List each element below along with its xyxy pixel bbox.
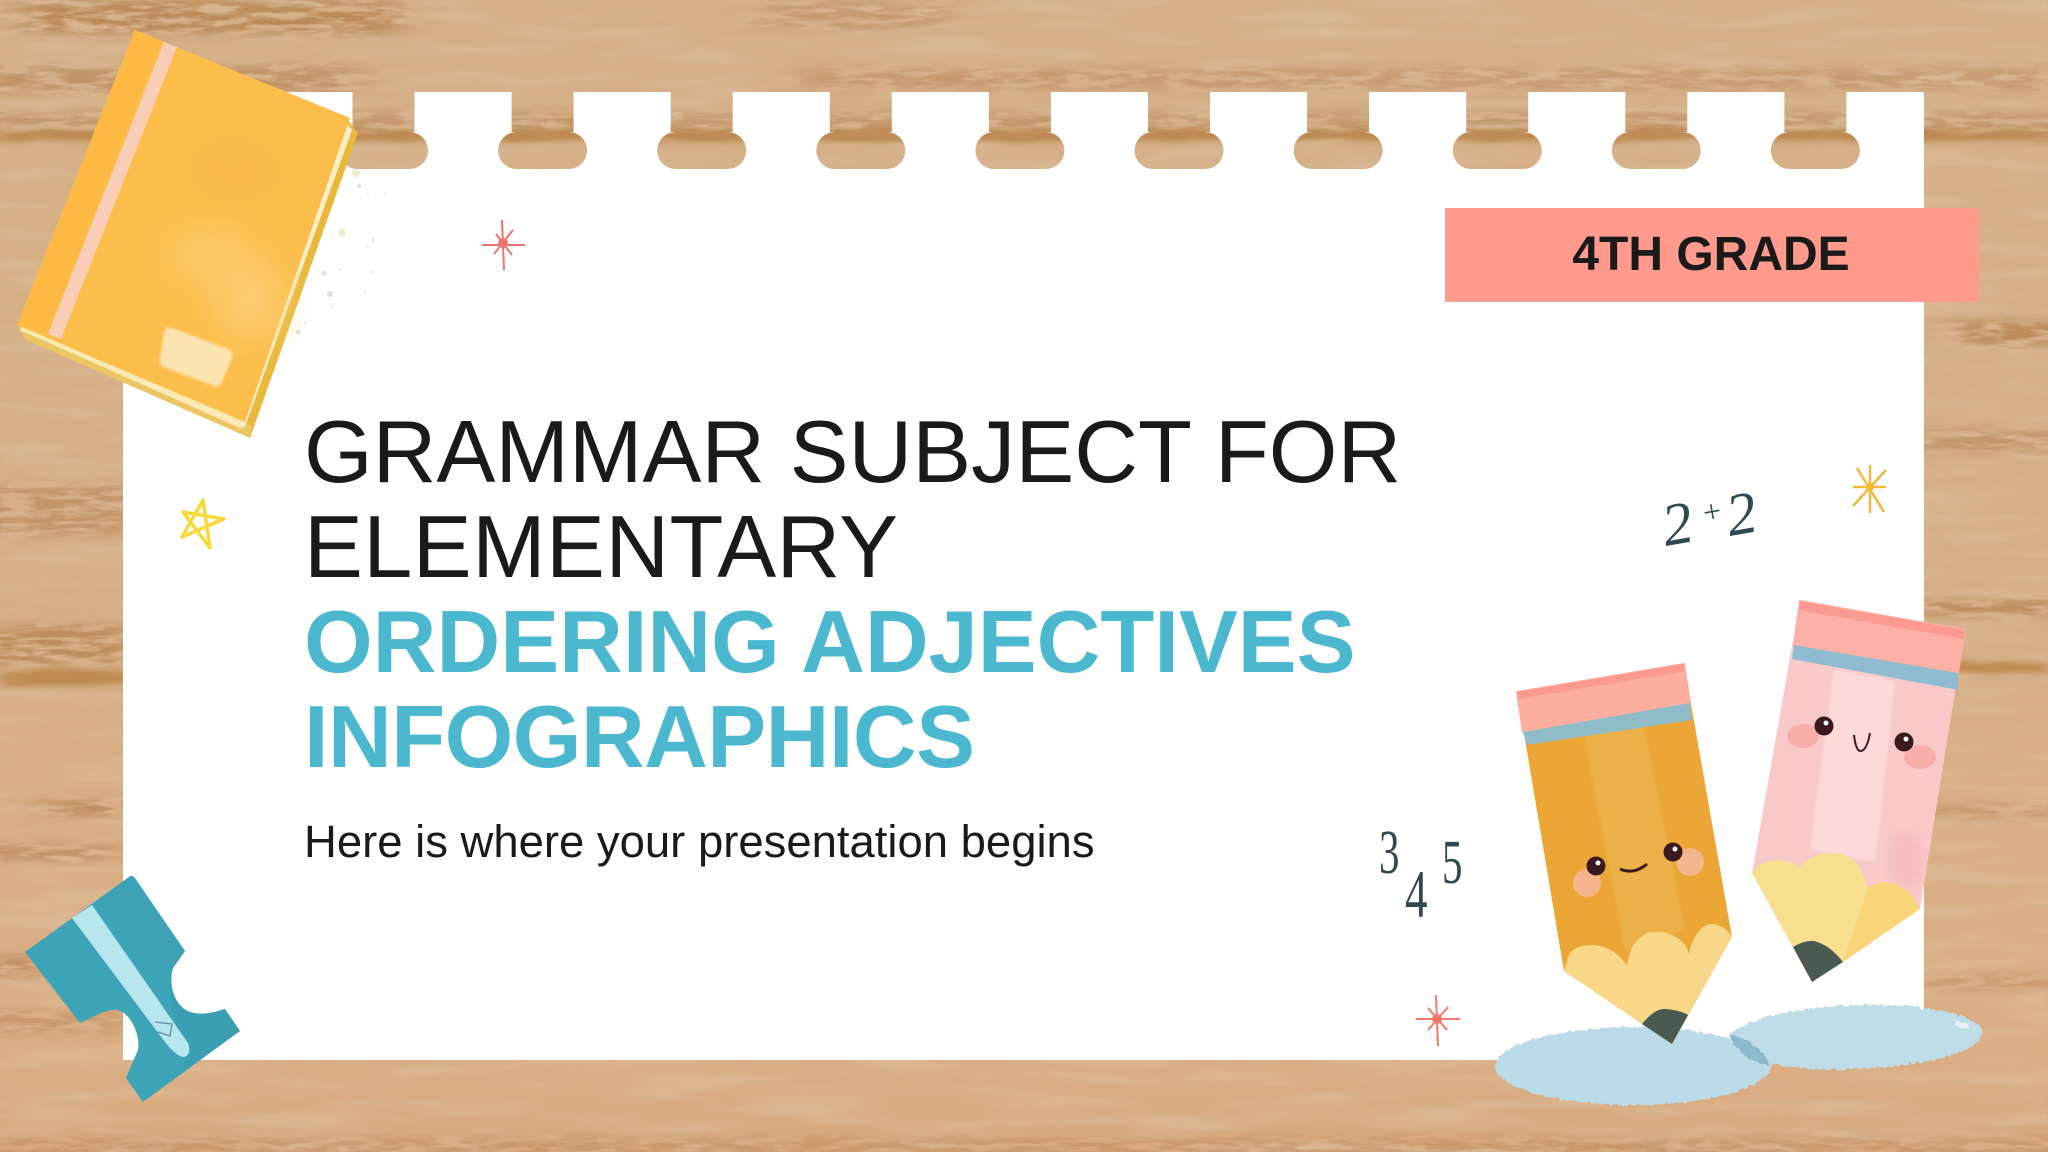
badge: 4th grade (1445, 208, 1979, 302)
icon: red sparkle top (482, 220, 525, 270)
handwritten numbers 3 4 5: 5 (1442, 829, 1462, 897)
icon: paint speckles near notebook (296, 169, 386, 334)
handwritten sum 2+2 (1657, 479, 1762, 559)
badge: 4th grade: 4TH GRADE (1572, 228, 1850, 281)
paper sheet with punched notches (123, 92, 1924, 1060)
icon: orange pencil character (1517, 664, 1732, 1044)
pink pencil eraser (1794, 601, 1965, 673)
handwritten sum 2+2: 2 (1721, 479, 1762, 549)
handwritten sum 2+2: 2 (1657, 489, 1698, 559)
pencil face (1573, 842, 1704, 897)
icon: water puddle left (1495, 1027, 1771, 1105)
handwritten sum 2+2: + (1698, 492, 1725, 531)
icon: water puddle right (1727, 1001, 1983, 1073)
notebook label (160, 328, 232, 386)
icon: yellow notebook (17, 30, 358, 438)
icon: yellow star doodle (182, 500, 224, 548)
pink pencil face (1787, 716, 1936, 769)
title (304, 402, 1401, 786)
title: ELEMENTARY (304, 497, 898, 596)
icon: pink pencil character (1752, 601, 1965, 982)
subtitle: Here is where your presentation begins (304, 816, 1095, 867)
handwritten numbers 3 4 5: 3 (1379, 819, 1399, 887)
title: INFOGRAPHICS (304, 687, 975, 786)
pencil lead (1642, 1009, 1688, 1044)
title: ORDERING ADJECTIVES (304, 592, 1356, 691)
icon: blue sharpener (25, 876, 240, 1102)
handwritten numbers 3 4 5: 4 (1405, 858, 1427, 932)
pencil eraser (1517, 664, 1690, 732)
icon: orange sparkle (1853, 465, 1886, 513)
icon: red sparkle bottom (1416, 995, 1460, 1046)
pink pencil lead (1793, 941, 1843, 982)
title: GRAMMAR SUBJECT FOR (304, 402, 1401, 501)
pencil sharpened wood (1564, 924, 1732, 1044)
handwritten numbers 3 4 5 (1379, 819, 1462, 932)
pink pencil sharpened wood (1752, 853, 1920, 982)
